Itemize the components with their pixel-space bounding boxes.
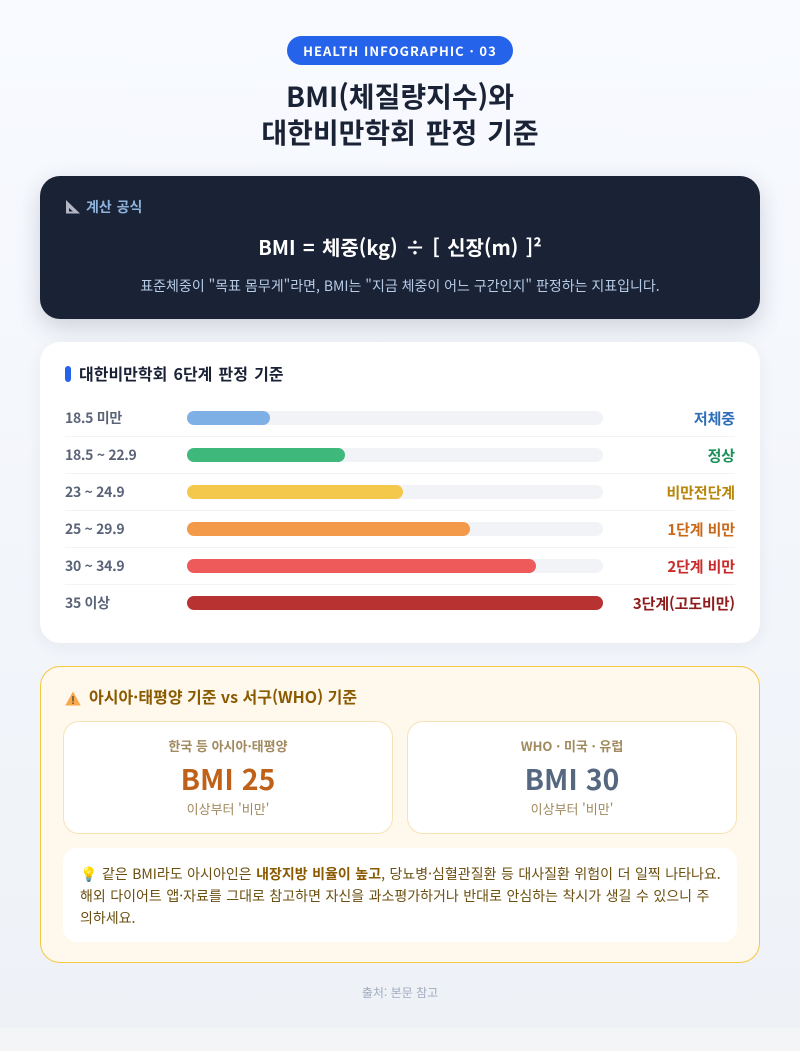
row: stage 1 — [65, 511, 735, 548]
row: underweight — [65, 400, 735, 437]
card: Asia — [63, 721, 393, 834]
note — [63, 848, 737, 942]
row: pre-obese: 23 ~ 24.9 — [65, 482, 124, 502]
card: WHO: 이상부터 '비만' — [531, 799, 613, 818]
row: stage 3: 3단계(고도비만) — [633, 593, 735, 614]
icon: triangle ruler — [66, 200, 80, 214]
row: stage 1: 25 ~ 29.9 — [65, 519, 124, 539]
title — [261, 76, 539, 152]
title: BMI(체질량지수)와 — [286, 76, 514, 116]
note text: 해외 다이어트 앱·자료를 그대로 참고하면 자신을 과소평가하거나 반대로 안심하는 착시가 생길 수 있으니 주 — [80, 886, 709, 906]
row: stage 3 — [65, 593, 735, 614]
formula description: 표준체중이 "목표 몸무게"라면, BMI는 "지금 체중이 어느 구간인지" 판정하는 지표입니다. — [140, 276, 660, 296]
accent marker — [65, 366, 71, 382]
panel heading: 대한비만학회 6단계 판정 기준 — [79, 361, 284, 385]
badge: HEALTH INFOGRAPHIC · 03 — [303, 41, 497, 60]
card: WHO: BMI 30 — [525, 758, 619, 799]
row: stage 2: 2단계 비만 — [667, 556, 735, 577]
row: stage 1: 1단계 비만 — [667, 519, 735, 540]
panel: formula — [40, 176, 760, 319]
row: pre-obese — [65, 474, 735, 511]
formula label: 계산 공식 — [86, 197, 142, 217]
row: normal: 18.5 ~ 22.9 — [65, 445, 137, 465]
panel: six-stage criteria — [40, 342, 760, 643]
panel heading: 아시아·태평양 기준 vs 서구(WHO) 기준 — [89, 684, 357, 708]
panel: Asia vs West — [40, 666, 760, 963]
source: 출처: 본문 참고 — [362, 984, 438, 1001]
row: underweight: 저체중 — [694, 408, 735, 429]
card: WHO: WHO · 미국 · 유럽 — [521, 736, 623, 755]
title: 대한비만학회 판정 기준 — [261, 112, 539, 152]
note text: 💡 같은 BMI라도 아시아인은 내장지방 비율이 높고, 당뇨병·심혈관질환 등 대사질환 위험이 더 일찍 나타나요. — [80, 864, 721, 884]
card: Asia: BMI 25 — [181, 758, 275, 799]
card: WHO — [407, 721, 737, 834]
card: Asia: 이상부터 '비만' — [187, 799, 269, 818]
badge — [287, 36, 513, 65]
row: stage 3: 35 이상 — [65, 593, 110, 613]
row: stage 2 — [65, 548, 735, 585]
formula: BMI = 체중(kg) ÷ [ 신장(m) ]² — [258, 232, 542, 261]
row: pre-obese: 비만전단계 — [666, 482, 735, 503]
row: normal — [65, 437, 735, 474]
row: underweight: 18.5 미만 — [65, 408, 122, 428]
note text: 의하세요. — [80, 908, 135, 928]
row: normal: 정상 — [708, 445, 735, 466]
card: Asia: 한국 등 아시아·태평양 — [168, 736, 288, 755]
note text — [80, 864, 721, 928]
icon: warning — [65, 692, 81, 706]
row: stage 2: 30 ~ 34.9 — [65, 556, 124, 576]
